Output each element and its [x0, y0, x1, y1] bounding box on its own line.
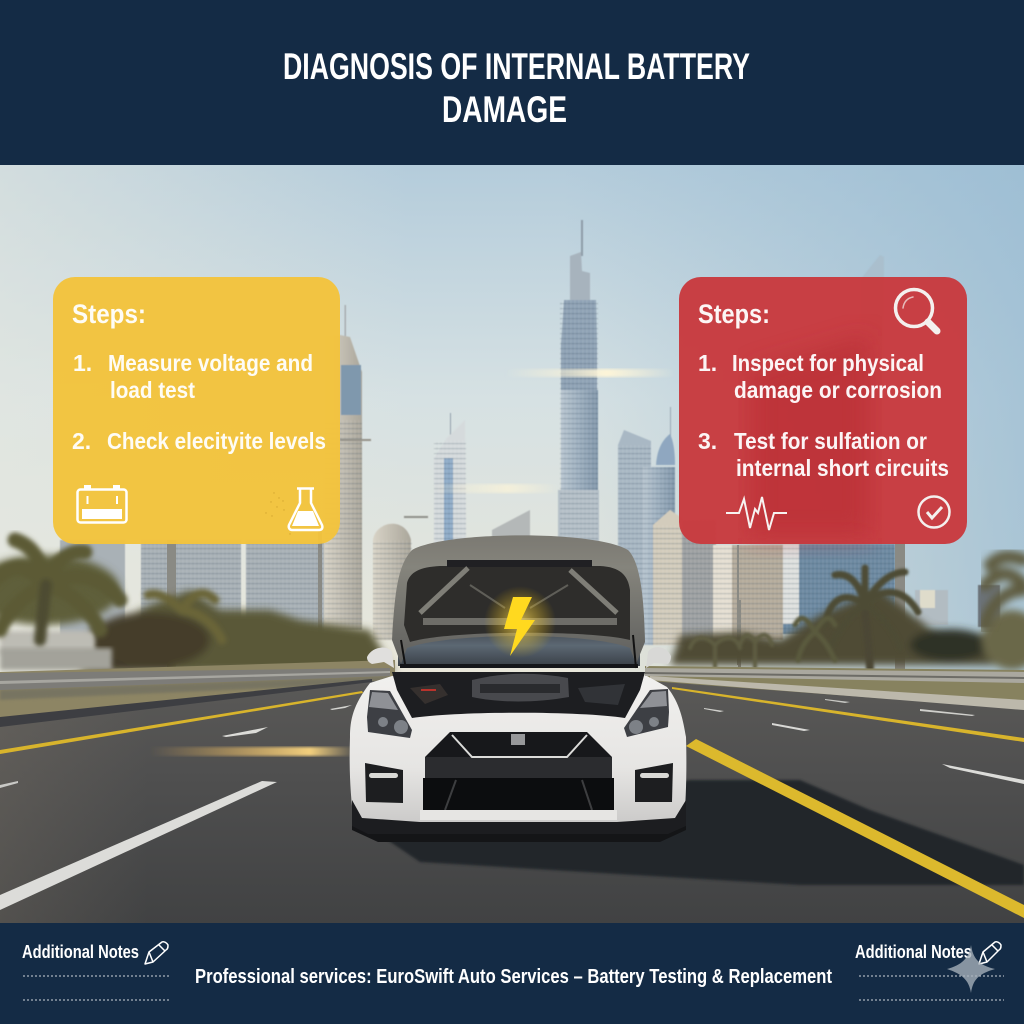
text: yellow step 2: 2.	[72, 428, 91, 454]
panel: yellow steps	[53, 277, 340, 544]
text: red step 1: damage or corrosion	[734, 377, 942, 403]
title	[283, 46, 750, 130]
icon: lightning bolt	[484, 586, 556, 658]
text: yellow step 1: Measure voltage and	[108, 350, 313, 376]
text: red step 3: internal short circuits	[736, 455, 949, 481]
text: red step 1: Inspect for physical	[732, 350, 924, 376]
car body	[350, 676, 686, 828]
footer band	[0, 923, 1024, 1024]
hood	[392, 535, 645, 664]
heading: red steps: Steps:	[698, 299, 770, 329]
windshield	[398, 625, 640, 666]
scene: Dubai skyline background	[0, 165, 1024, 685]
footer notes: right	[855, 942, 1004, 1000]
text: red step 3: Test for sulfation or	[734, 428, 927, 454]
mirrors	[367, 648, 394, 668]
guard rails	[0, 668, 390, 690]
text: red step 1: 1.	[698, 350, 717, 376]
grille	[425, 732, 612, 778]
skyline towers	[60, 220, 1000, 680]
headlights	[367, 690, 412, 738]
header band	[0, 0, 1024, 165]
icon: battery	[78, 485, 126, 522]
heading: yellow steps: Steps:	[72, 299, 146, 329]
text: red step 1	[698, 350, 942, 403]
lamp posts	[167, 530, 905, 680]
slanted tower	[450, 413, 451, 443]
road surface	[0, 681, 1024, 923]
footer services line: Professional services: EuroSwift Auto Services – Battery Testing & Replacement	[195, 966, 832, 988]
car shadow	[380, 780, 1024, 885]
footer notes: left: Additional Notes	[22, 942, 139, 962]
text: red step 3	[698, 428, 949, 481]
engine bay	[392, 672, 645, 718]
icon: pencil left	[145, 942, 168, 964]
icon: sparkle	[947, 945, 995, 993]
panel: red steps	[679, 277, 967, 544]
text: red step 3: 3.	[698, 428, 717, 454]
text: yellow step 1	[73, 350, 313, 403]
title: DAMAGE	[442, 89, 567, 130]
icon: check circle	[918, 496, 950, 528]
title: DIAGNOSIS OF INTERNAL BATTERY	[283, 46, 750, 87]
text: yellow step 1: 1.	[73, 350, 92, 376]
fog lights	[365, 763, 403, 803]
footer notes: left	[22, 942, 169, 1000]
small domed tower	[373, 524, 411, 640]
kerbs	[0, 679, 372, 727]
text: yellow step 1: load test	[110, 377, 195, 403]
road flare	[150, 747, 355, 756]
car with open hood	[350, 535, 686, 842]
icon: flask	[265, 488, 322, 535]
bumper lip	[352, 800, 686, 834]
icon: magnifying glass	[896, 290, 937, 331]
icon: pencil right	[979, 942, 1001, 964]
icon: heartbeat line	[726, 497, 787, 530]
towers right of centre	[618, 430, 651, 645]
road	[0, 660, 1024, 923]
sun flares	[505, 369, 675, 377]
under shadow	[352, 800, 686, 842]
left tower	[344, 305, 346, 337]
footer notes: right: Additional Notes	[855, 942, 972, 962]
palm trees and shrubs	[0, 540, 1024, 672]
lane markings	[0, 691, 363, 754]
roadside verges	[0, 660, 395, 730]
text: yellow step 2: Check elecityite levels	[107, 428, 326, 454]
central supertall tower	[581, 220, 583, 256]
